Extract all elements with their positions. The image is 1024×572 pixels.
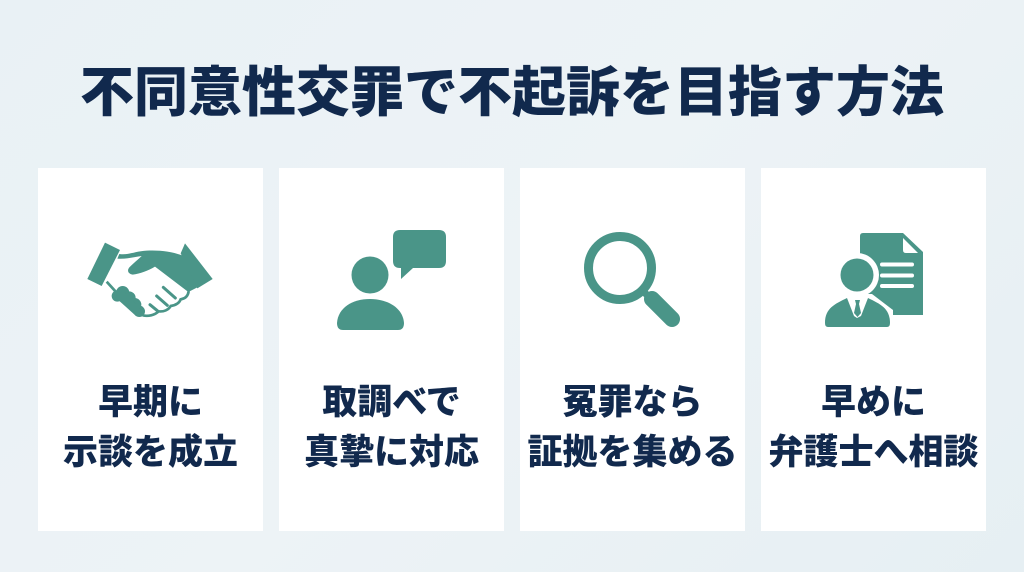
label: consult a lawyer [768,383,978,472]
label: early settlement: 早期に [98,383,203,422]
panel: early settlement [38,168,263,531]
panel: consult a lawyer [761,168,986,531]
label: early settlement [63,383,238,472]
icon: handshake [87,243,213,317]
icon: lawyer with document [820,233,923,332]
label: gather evidence: 冤罪なら [562,383,702,422]
panel: gather evidence [520,168,745,531]
label: sincere interrogation: 真摯に対応 [304,433,479,472]
label: gather evidence: 証拠を集める [527,433,738,472]
label: sincere interrogation [304,383,479,472]
panel: sincere interrogation [279,168,504,531]
title: 不同意性交罪で不起訴を目指す方法 [80,63,944,123]
icon: magnifying glass [588,236,672,319]
icon: person with speech bubble [337,230,446,330]
label: early settlement: 示談を成立 [63,433,238,472]
label: consult a lawyer: 弁護士へ相談 [768,433,978,472]
label: sincere interrogation: 取調べで [322,383,461,422]
label: consult a lawyer: 早めに [821,383,926,422]
label: gather evidence [527,383,738,472]
